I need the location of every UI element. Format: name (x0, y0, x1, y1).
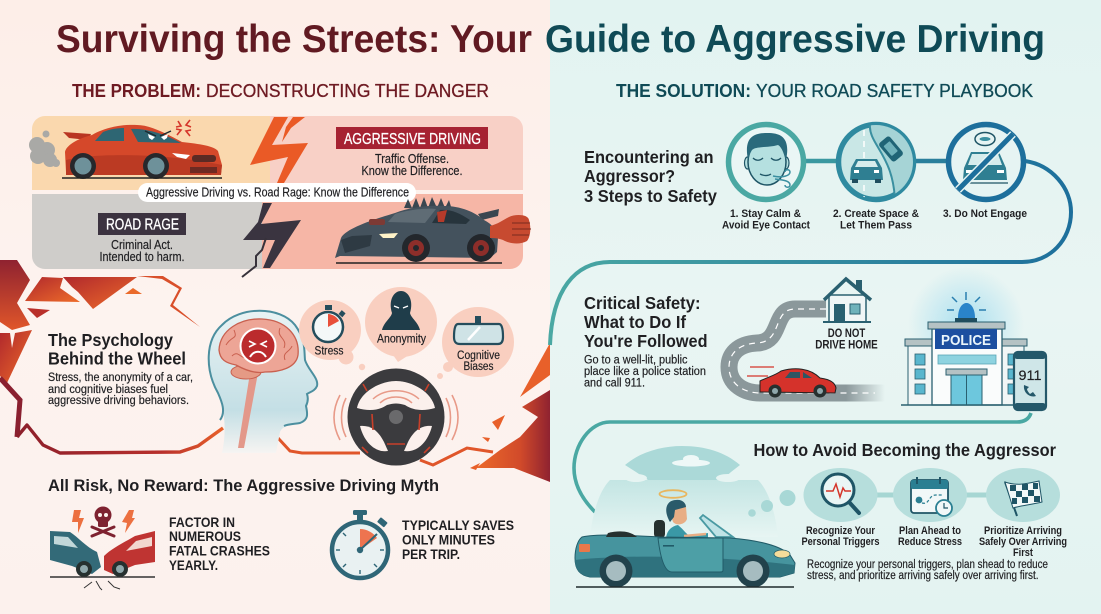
text: factor in numerous fatal crashes (169, 515, 270, 573)
icon: head with angry brain (209, 311, 317, 453)
label: step 2: Let Them Pass (840, 220, 912, 232)
text: critical safety: Critical Safety: (584, 293, 700, 313)
text: critical safety: and call 911. (584, 378, 645, 390)
text: critical safety: You're Followed (584, 331, 708, 351)
label: recognize your personal triggers: Personal Triggers (802, 536, 880, 548)
label: plan ahead to reduce stress: Reduce Stress (898, 536, 962, 548)
icon: stress stopwatch (313, 305, 346, 342)
frame: red cracked border around psychology section (0, 260, 550, 482)
label: step 1 (722, 208, 810, 232)
text: critical safety: Go to a well-lit, public (584, 354, 688, 366)
heading: the solution (616, 81, 1033, 101)
panel: cognitive biases thought bubble: Biases (464, 361, 494, 373)
background: solution side (550, 0, 1101, 614)
label: step 1: 1. Stay Calm & (730, 208, 801, 220)
label: plan ahead to reduce stress: Plan Ahead to (899, 525, 961, 537)
heading: the problem (72, 81, 489, 101)
label: step 2 (833, 208, 919, 232)
text: the psychology behind the wheel: Behind the Wheel (48, 348, 186, 368)
icon: dome sky behind car (590, 446, 778, 537)
icon: orange lightning bolt (250, 117, 308, 183)
text: the psychology behind the wheel: The Psychology (48, 330, 173, 350)
title (56, 18, 1045, 61)
label: aggressive driving (336, 127, 488, 149)
icon: anger mark (176, 120, 191, 136)
text: factor in numerous fatal crashes: FATAL CRASHES (169, 544, 270, 558)
label: do not drive home (815, 328, 878, 352)
label: aggressive driving: AGGRESSIVE DRIVING (344, 131, 481, 148)
icon: siren light (947, 292, 986, 322)
text: encountering an aggressor (584, 147, 717, 206)
icon: recognize triggers magnifier (804, 468, 878, 522)
text: the psychology behind the wheel (48, 330, 193, 407)
icon: dark lightning bolt (242, 203, 301, 277)
label: prioritize arriving safely: Prioritize Arriving (984, 525, 1062, 537)
text: traffic offense: Know the Difference. (362, 164, 462, 178)
step connectors (804, 159, 947, 163)
icon: red car on road (747, 367, 836, 398)
icon: police station (901, 267, 1027, 405)
icon: steering wheel (334, 368, 458, 466)
icon: hooded figure (382, 291, 420, 330)
icon: skull and crossbones (92, 506, 114, 536)
icon: checkered flag (986, 468, 1060, 522)
heading: the problem: THE PROBLEM: (72, 81, 201, 101)
label: prioritize arriving safely: Safely Over Arriving (979, 536, 1067, 548)
icon: house (823, 279, 871, 322)
icon: angry red car with smoke (29, 120, 222, 179)
icon: halo (660, 490, 686, 498)
text: criminal act: Intended to harm. (100, 250, 184, 264)
label: recognize your personal triggers (802, 525, 880, 548)
text: factor in numerous fatal crashes: YEARLY. (169, 558, 218, 573)
text: avoid becoming the aggressor summary: Recognize your personal triggers, plan shead to reduce (807, 559, 1048, 571)
text: typically saves only minutes: ONLY MINUTES (402, 532, 495, 548)
label: recognize your personal triggers: Recognize Your (806, 525, 876, 537)
text: encountering an aggressor: Aggressor? (584, 166, 675, 186)
panel: aggressive driving vs road rage (0, 116, 1071, 590)
background: problem side (0, 0, 551, 614)
panel: stress thought bubble: Stress (314, 346, 344, 358)
panel: cognitive biases thought bubble: Cognitive (457, 350, 500, 362)
icon: phone 911 (1014, 352, 1046, 410)
text: critical safety: What to Do If (584, 312, 686, 332)
text: factor in numerous fatal crashes: FACTOR IN (169, 515, 235, 530)
icon: driver (654, 500, 708, 538)
text: criminal act (100, 238, 184, 264)
label: road rage: ROAD RAGE (106, 216, 179, 234)
thought bubble dots (748, 490, 796, 517)
icon: winding road (729, 309, 885, 393)
text: critical safety (584, 293, 708, 390)
icon: teal convertible with driver (575, 490, 795, 588)
path: connector to section three (574, 413, 1031, 512)
callout: know the difference pill (138, 183, 416, 202)
text: typically saves only minutes (402, 518, 514, 562)
text: typically saves only minutes: PER TRIP. (402, 547, 460, 562)
text: encountering an aggressor: Encountering an (584, 147, 714, 167)
heading: the problem: DECONSTRUCTING THE DANGER (206, 81, 489, 101)
text: traffic offense (362, 152, 462, 178)
label: do not drive home: DO NOT (828, 328, 865, 340)
icon: car passing (878, 135, 904, 163)
icon: step 1 calm face (728, 124, 804, 200)
text: avoid becoming the aggressor summary (807, 559, 1048, 582)
label: police sign: POLICE (941, 332, 991, 349)
label: prioritize arriving safely (979, 525, 1067, 559)
icon: car crash with skull (50, 506, 155, 590)
text: traffic offense: Traffic Offense. (375, 152, 449, 166)
text: critical safety: place like a police station (584, 366, 706, 378)
heading: how to avoid becoming the aggressor: How to Avoid Becoming the Aggressor (754, 440, 1056, 460)
label: step 2: 2. Create Space & (833, 208, 919, 220)
label: step 3: 3. Do Not Engage (943, 208, 1027, 220)
icon: car in lane (850, 159, 883, 183)
label: do not drive home: DRIVE HOME (815, 340, 878, 352)
icon: rearview mirror (454, 316, 503, 344)
text: criminal act: Criminal Act. (111, 238, 173, 252)
icon: angry face (240, 328, 276, 364)
heading: all risk, no reward: All Risk, No Reward: The Aggressive Driving Myth (48, 476, 439, 495)
text: encountering an aggressor: 3 Steps to Safety (584, 186, 717, 206)
panel: stress thought bubble (299, 300, 365, 370)
text: the psychology behind the wheel: Stress, the anonymity of a car, (48, 372, 193, 384)
text: avoid becoming the aggressor summary: stress, and prioritize arriving safely over arriving first. (807, 570, 1038, 582)
icon: plan ahead calendar (893, 468, 967, 522)
icon: windshield (700, 515, 733, 537)
icon: step 2 create space (838, 124, 920, 205)
title: Surviving the Streets: Your (56, 18, 532, 61)
connectors between avoid icons (875, 492, 988, 498)
callout: know the difference pill: Aggressive Driving vs. Road Rage: Know the Difference (146, 186, 409, 200)
label: prioritize arriving safely: First (1013, 547, 1033, 559)
icon: step 3 do not engage (948, 124, 1024, 200)
path: connector from step three to section two (550, 161, 1071, 345)
icon: phone 911: 911 (1018, 367, 1042, 383)
label: step 1: Avoid Eye Contact (722, 220, 810, 232)
text: the psychology behind the wheel: aggressive driving behaviors. (48, 395, 189, 407)
text: the psychology behind the wheel: and cognitive biases fuel (48, 384, 168, 396)
heading: the solution: YOUR ROAD SAFETY PLAYBOOK (756, 81, 1033, 101)
label: road rage (98, 213, 186, 235)
heading: the solution: THE SOLUTION: (616, 81, 751, 101)
panel: anonymity thought bubble: Anonymity (377, 334, 426, 346)
label: plan ahead to reduce stress (898, 525, 962, 548)
panel: anonymity thought bubble (365, 287, 437, 362)
icon: fist (490, 215, 531, 244)
icon: spiked dark car with fist (335, 197, 531, 263)
text: factor in numerous fatal crashes: NUMEROUS (169, 529, 241, 544)
text: typically saves only minutes: TYPICALLY SAVES (402, 518, 514, 533)
icon: stopwatch (332, 510, 388, 578)
panel: cognitive biases thought bubble (437, 307, 514, 379)
title: Guide to Aggressive Driving (545, 18, 1045, 61)
